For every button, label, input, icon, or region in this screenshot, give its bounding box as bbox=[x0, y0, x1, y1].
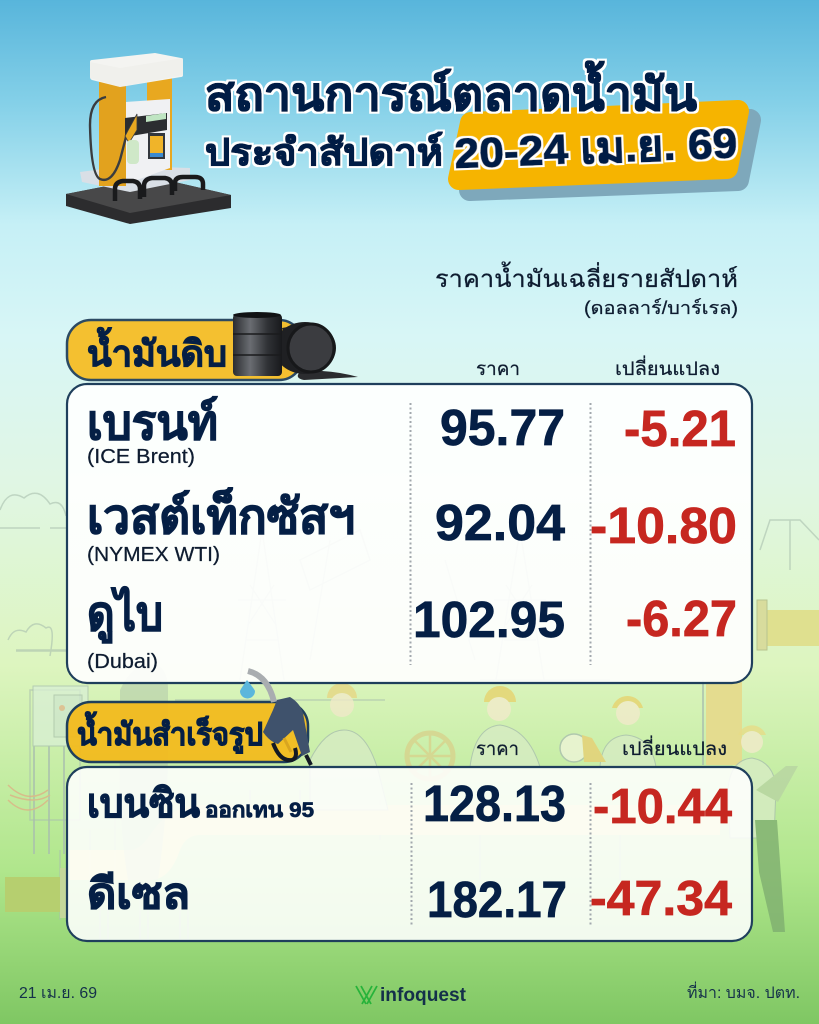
row: WTI: (NYMEX WTI) bbox=[87, 544, 220, 566]
icon: oil barrels bbox=[233, 312, 358, 380]
row: Dubai: (Dubai) bbox=[87, 651, 158, 673]
row: WTI: -10.80 bbox=[590, 497, 737, 554]
row: Brent: -5.21 bbox=[624, 400, 736, 457]
row: Brent: 95.77 bbox=[440, 399, 565, 456]
background illustration: pipes bbox=[5, 600, 819, 918]
label: price: ราคา bbox=[476, 359, 520, 380]
unit: (ดอลลาร์/บาร์เรล) bbox=[584, 298, 738, 318]
source: ที่มา: บมจ. ปตท. bbox=[687, 981, 800, 1002]
row: Dubai: ดูไบ bbox=[87, 585, 163, 644]
row: Brent: เบรนท์ bbox=[87, 396, 218, 450]
row: diesel: -47.34 bbox=[590, 872, 732, 926]
date badge bbox=[459, 111, 738, 179]
row: gasoline: 128.13 bbox=[423, 775, 566, 832]
background illustration: control cabinet bbox=[8, 686, 88, 854]
row: Dubai bbox=[87, 585, 737, 673]
row: diesel: 182.17 bbox=[427, 871, 567, 928]
icon: fuel nozzle bbox=[240, 671, 311, 765]
footer date: 21 เม.ย. 69 bbox=[19, 985, 97, 1002]
row: gasoline bbox=[87, 775, 732, 834]
label: price: ราคา bbox=[476, 739, 519, 760]
date badge shadow bbox=[470, 120, 750, 190]
panel: crude oil prices bbox=[67, 384, 752, 683]
heading pill: refined oil bbox=[67, 702, 308, 762]
row: gasoline: ออกเทน 95 bbox=[205, 799, 314, 822]
heading pill: crude oil bbox=[67, 320, 303, 380]
title line 1: สถานการณ์ตลาดน้ำมัน bbox=[205, 60, 698, 120]
label: change: เปลี่ยนแปลง bbox=[622, 735, 727, 760]
row: WTI: 92.04 bbox=[435, 494, 566, 551]
row: WTI bbox=[87, 487, 737, 566]
row: Brent: (ICE Brent) bbox=[87, 446, 195, 468]
subtitle line: ราคาน้ำมันเฉลี่ยรายสัปดาห์ bbox=[435, 261, 738, 293]
row: Dubai: -6.27 bbox=[626, 590, 737, 647]
icon: fuel pump bbox=[66, 53, 231, 224]
subtitle bbox=[435, 261, 738, 318]
heading pill: refined oil: น้ำมันสำเร็จรูป bbox=[77, 711, 263, 754]
logo: infoquest: infoquest bbox=[380, 985, 467, 1006]
heading pill: crude oil: น้ำมันดิบ bbox=[87, 327, 227, 374]
row: gasoline: เบนซิน bbox=[87, 782, 200, 826]
background illustration: oil field and workers bbox=[0, 493, 819, 940]
row: gasoline: -10.44 bbox=[593, 780, 732, 834]
column labels: refined oil bbox=[476, 735, 727, 760]
row: diesel: ดีเซล bbox=[87, 870, 190, 917]
column labels: crude oil bbox=[476, 355, 720, 380]
label: change: เปลี่ยนแปลง bbox=[615, 355, 720, 380]
row: WTI: เวสต์เท็กซัสฯ bbox=[87, 487, 355, 544]
title bbox=[205, 60, 738, 177]
date range: 20-24 เม.ย. 69 bbox=[454, 119, 738, 177]
panel: refined oil prices bbox=[67, 767, 752, 941]
row: Dubai: 102.95 bbox=[413, 591, 565, 648]
background illustration: workers bbox=[120, 664, 798, 932]
row: diesel bbox=[87, 870, 732, 928]
title line 2: ประจำสัปดาห์ bbox=[205, 132, 443, 173]
row: Brent bbox=[87, 396, 736, 468]
